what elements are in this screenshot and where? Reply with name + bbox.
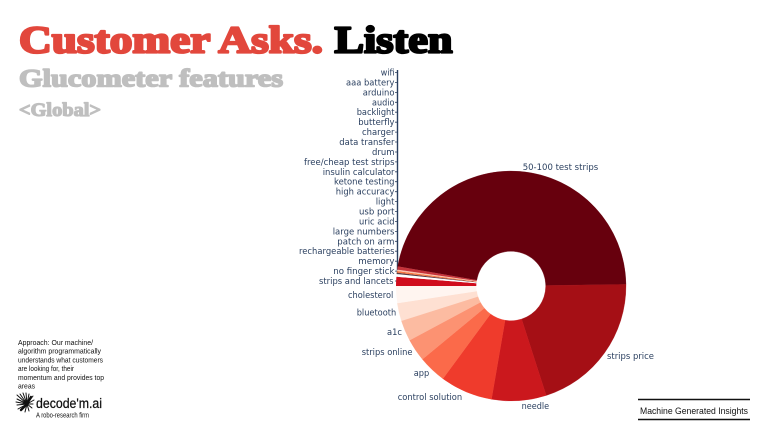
slice: bluetooth — [397, 291, 478, 321]
y axis with feature labels: wifi — [381, 68, 394, 78]
title: Customer Asks. — [19, 20, 323, 62]
donut slice labels: cholesterol — [348, 291, 393, 301]
slice: memory — [397, 273, 476, 282]
donut slice labels — [348, 163, 654, 412]
slice: strips price — [522, 284, 626, 396]
logo tagline: A robo-research firm — [36, 412, 89, 420]
y axis with feature labels: strips and lancets — [319, 277, 394, 287]
approach text block: areas — [18, 384, 35, 390]
y axis with feature labels: insulin calculator — [323, 168, 395, 178]
approach text block: are looking for, their — [18, 366, 75, 373]
y axis with feature labels: ketone testing — [334, 178, 394, 188]
approach text block: understands what customers — [18, 358, 103, 364]
slice: strips online — [410, 302, 484, 359]
badge: Machine Generated Insights: Machine Generated Insights — [640, 406, 748, 417]
subtitle: Glucometer features — [19, 64, 283, 92]
slice: needle — [492, 319, 546, 401]
y axis with feature labels: butterfly — [358, 118, 395, 128]
donut slice labels: needle — [522, 402, 550, 412]
donut chart — [396, 171, 626, 401]
slice: rechargeable batteries — [397, 271, 477, 282]
y axis with feature labels: aaa battery — [346, 78, 395, 88]
title: Listen — [334, 20, 452, 62]
approach text block — [18, 340, 104, 390]
slice: no finger stick — [396, 274, 476, 283]
approach text block: momentum and provides top — [18, 375, 104, 382]
y axis with feature labels: arduino — [363, 88, 395, 98]
y axis with feature labels: memory — [358, 257, 395, 267]
y axis with feature labels: light — [376, 198, 395, 208]
y axis with feature labels: charger — [362, 128, 395, 138]
y axis with feature labels: rechargeable batteries — [299, 247, 395, 257]
logo: decode'm.ai — [16, 393, 102, 420]
slice: patch on arm — [397, 270, 477, 282]
approach text block: algorithm programmatically — [18, 348, 101, 356]
y axis with feature labels: audio — [372, 98, 395, 108]
slice: strips and lancets — [396, 277, 476, 286]
y axis with feature labels: drum — [372, 148, 394, 158]
donut slice labels: strips online — [362, 348, 413, 358]
slice: large numbers — [397, 266, 477, 281]
icon: logo mark — [16, 393, 34, 412]
title — [19, 20, 452, 62]
y axis with feature labels: no finger stick — [333, 267, 395, 277]
slice: app — [422, 308, 490, 379]
y axis with feature labels: data transfer — [339, 138, 395, 148]
donut slice labels: bluetooth — [357, 308, 396, 318]
approach text block: Approach: Our machine/ — [18, 340, 93, 347]
y axis with feature labels: usb port — [359, 208, 395, 218]
y axis with feature labels — [299, 68, 398, 287]
y axis with feature labels: free/cheap test strips — [304, 158, 395, 168]
y axis with feature labels: backlight — [357, 108, 395, 118]
slice: control solution — [443, 314, 505, 399]
region label: <Global> — [19, 101, 101, 121]
donut slice labels: app — [414, 369, 429, 379]
slice: a1c — [401, 296, 480, 340]
slice: cholesterol — [396, 286, 477, 303]
y axis with feature labels: patch on arm — [337, 237, 394, 247]
y axis with feature labels: uric acid — [359, 218, 394, 228]
logo wordmark: decode'm.ai — [36, 396, 102, 411]
donut slice labels: control solution — [398, 393, 462, 403]
badge: Machine Generated Insights — [638, 400, 750, 420]
donut slice labels: 50-100 test strips — [523, 163, 598, 173]
donut slice labels: a1c — [387, 328, 402, 338]
y axis with feature labels: high accuracy — [336, 188, 395, 198]
donut slice labels: strips price — [607, 352, 654, 362]
y axis with feature labels: large numbers — [333, 227, 395, 237]
slice: 50-100 test strips — [398, 171, 626, 286]
